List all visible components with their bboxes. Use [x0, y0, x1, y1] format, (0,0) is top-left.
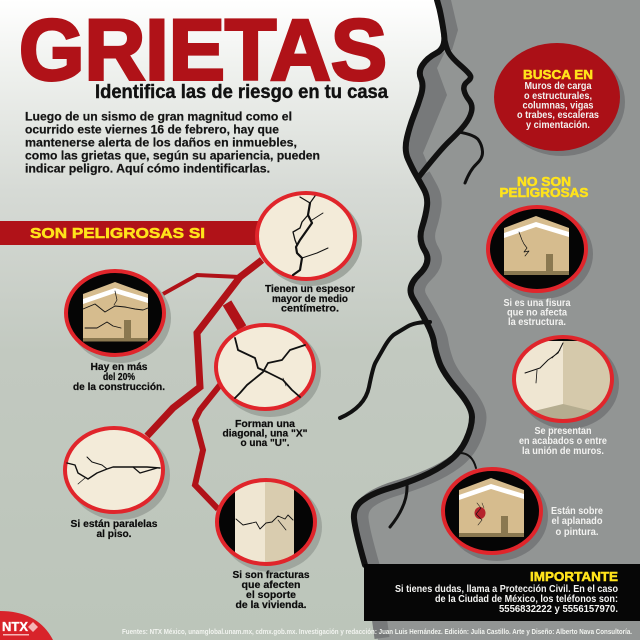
caption: del 20%: [103, 372, 135, 383]
intro text: mantenerse alerta de los daños en inmuebles,: [25, 136, 297, 150]
callout: busca en: o estructurales,: [524, 91, 592, 102]
caption: el soporte: [246, 590, 296, 601]
panel: plaster or paint house: [443, 469, 603, 561]
subtitle: Identifica las de riesgo en tu casa: [95, 82, 388, 103]
caption: al piso.: [96, 529, 132, 540]
caption: la estructura.: [508, 317, 566, 328]
callout: busca en: o trabes, escaleras: [517, 110, 600, 121]
callout: importante: 5556832222 y 5556157970.: [499, 603, 618, 615]
background: grey cracked wall: [354, 0, 640, 640]
caption: Si son fracturas: [232, 570, 310, 581]
caption: Hay en más: [90, 362, 148, 373]
panel: parallel crack: [65, 428, 170, 540]
panel: support fracture: [217, 470, 322, 611]
caption: o pintura.: [556, 527, 599, 538]
caption: de la vivienda.: [236, 600, 307, 611]
panel: more than 20 percent: [66, 271, 171, 393]
heading: no son peligrosas: PELIGROSAS: [500, 186, 588, 200]
caption: de la construcción.: [73, 382, 165, 393]
caption: que no afecta: [507, 308, 568, 318]
intro text: [25, 110, 320, 176]
caption: [265, 284, 355, 314]
red connector branches: [147, 260, 262, 509]
caption: Si es una fisura: [504, 298, 571, 309]
callout: busca en: [494, 43, 625, 156]
callout: busca en: Muros de carga: [524, 81, 592, 92]
heading: no son peligrosas: [500, 175, 588, 200]
caption: mayor de medio: [272, 294, 348, 305]
intro text: Luego de un sismo de gran magnitud como el: [25, 110, 292, 124]
caption: [222, 419, 308, 449]
banner: son peligrosas si: [0, 221, 262, 245]
caption: en acabados o entre: [519, 436, 607, 447]
crack shadow: [361, 0, 479, 638]
panel: wall finish corner: [510, 330, 620, 457]
intro text: indicar peligro. Aquí cómo indentificarlas.: [25, 162, 270, 176]
panel: fissure house: [488, 207, 593, 328]
title: GRIETAS: [19, 2, 387, 98]
panel: diagonal crack: [216, 325, 321, 449]
icon: house: [459, 478, 524, 537]
caption: el aplanado: [552, 516, 603, 527]
caption: la unión de muros.: [522, 446, 604, 457]
callout: busca en: y cimentación.: [526, 120, 590, 131]
caption: [232, 570, 310, 611]
intro text: ocurrido este viernes 16 de febrero, hay que: [25, 122, 279, 136]
banner: son peligrosas si: SON PELIGROSAS SI: [30, 226, 205, 242]
icon: house: [504, 216, 569, 275]
caption: Tienen un espesor: [265, 284, 355, 295]
caption: Se presentan: [534, 426, 592, 437]
icon: house: [83, 282, 148, 342]
caption: diagonal, una "X": [222, 428, 308, 440]
caption: [504, 298, 571, 328]
callout: busca en: BUSCA EN: [523, 67, 593, 82]
caption: [551, 506, 603, 538]
caption: [519, 426, 607, 457]
caption: Si están paralelas: [70, 519, 158, 530]
callout: busca en: columnas, vigas: [522, 100, 594, 112]
caption: [70, 519, 158, 540]
caption: que afecten: [242, 580, 300, 591]
caption: Están sobre: [551, 506, 603, 517]
callout: importante: IMPORTANTE: [530, 569, 618, 584]
caption: centímetro.: [281, 304, 339, 314]
intro text: como las grietas que, según su apariencia, pueden: [25, 148, 320, 162]
heading: no son peligrosas: NO SON: [517, 175, 571, 189]
main crack: [340, 0, 483, 565]
caption: [73, 362, 165, 393]
callout: importante: [364, 564, 640, 621]
logo: NTX: NTX: [2, 620, 29, 634]
panel: thickness crack: [257, 193, 362, 314]
caption: o una "U".: [240, 438, 290, 449]
caption: Forman una: [235, 419, 295, 430]
logo: NTX: [0, 611, 53, 640]
